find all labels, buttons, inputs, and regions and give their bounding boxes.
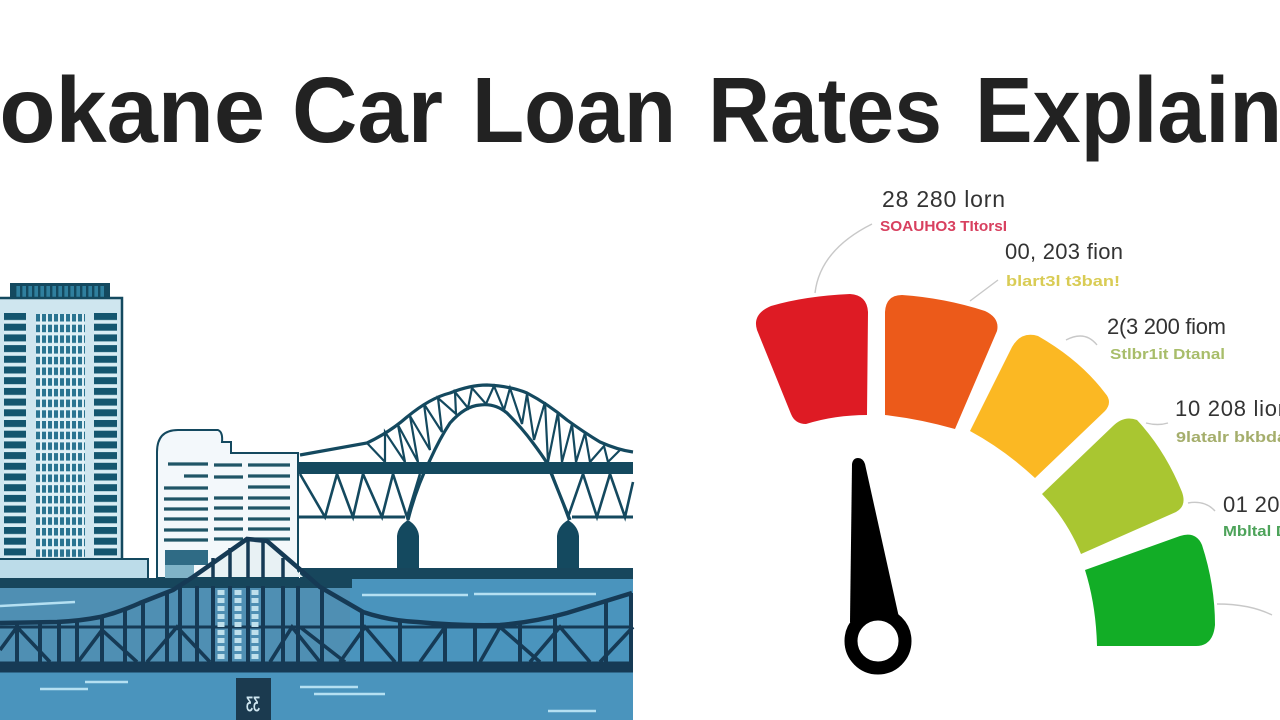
gauge chart	[756, 224, 1272, 668]
label: tier 1: SOAUHO3 TItorsI	[880, 218, 1007, 235]
upper arch bridge	[298, 385, 633, 520]
label: tier 4	[1175, 396, 1280, 446]
leader lines	[815, 224, 1272, 615]
label: tier 2: 00, 203 fion	[1005, 239, 1123, 264]
label: tier 4: 9latalr bkbdal	[1176, 429, 1280, 446]
illustration: Spokane skyline and bridges	[0, 283, 633, 720]
label: tier 1	[880, 186, 1007, 235]
river embankments	[0, 568, 633, 588]
title	[0, 58, 1280, 162]
title: Car	[292, 58, 443, 162]
label: tier 2	[1005, 239, 1123, 290]
lower pier with carved marks: ƸƸ	[246, 693, 260, 712]
gauge segment: lime	[1042, 418, 1184, 554]
gauge segment: green	[1085, 535, 1215, 646]
title: Rates	[708, 58, 942, 162]
gauge segment: yellow	[970, 335, 1109, 478]
lower pier with carved marks	[236, 678, 271, 720]
low-rise building	[157, 430, 298, 578]
label: tier 3	[1107, 314, 1226, 363]
title: Loan	[472, 58, 676, 162]
label: tier 3: Stlbr1it Dtanal	[1110, 346, 1225, 363]
gauge segment: orange	[885, 295, 998, 429]
gauge needle	[850, 458, 905, 668]
tall tower	[0, 283, 148, 579]
label: tier 3: 2(3 200 fiom	[1107, 314, 1226, 339]
label: tier 5	[1223, 492, 1280, 540]
label: tier 1: 28 280 lorn	[882, 186, 1005, 212]
label: tier 2: blart3l t3ban!	[1006, 273, 1120, 290]
lower truss bridge	[0, 539, 633, 667]
gauge segment: red	[756, 294, 868, 424]
bridge piers	[397, 520, 579, 570]
river water	[0, 578, 633, 720]
